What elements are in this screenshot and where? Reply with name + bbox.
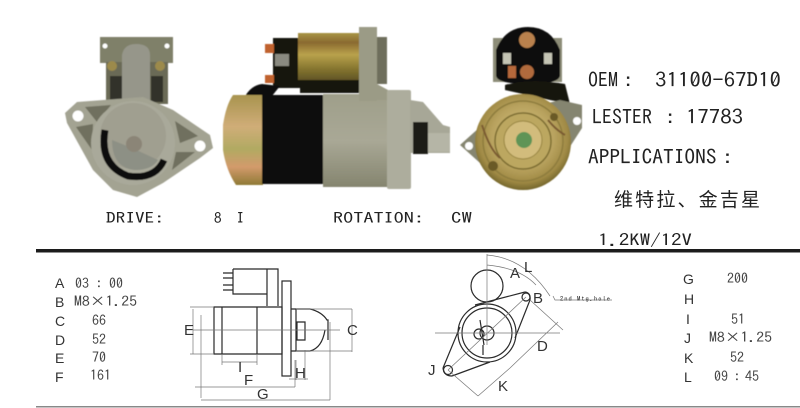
diagram: side dimension drawing: I bbox=[238, 359, 242, 376]
divider: bottom rule bbox=[36, 406, 800, 408]
diagram: side dimension drawing: H bbox=[295, 365, 306, 382]
spec: OEM number: OEM bbox=[588, 70, 618, 90]
diagram: side dimension drawing: E bbox=[184, 322, 194, 339]
spec: OEM number: 31100-67D10 bbox=[655, 70, 781, 90]
dimension table: left: 52 bbox=[92, 332, 106, 346]
dimension table: left: C bbox=[55, 313, 65, 329]
dimension table: left: 70 bbox=[92, 350, 106, 364]
dimension table: right: K bbox=[684, 350, 694, 366]
dimension table: right bbox=[683, 271, 772, 385]
spec: applications heading: APPLICATIONS： bbox=[588, 147, 738, 167]
dimension table: left: E bbox=[55, 350, 64, 366]
dimension table: left: 00 bbox=[109, 276, 123, 290]
dimension table: right: I bbox=[686, 311, 690, 327]
dimension table: right: J bbox=[684, 330, 691, 346]
dimension table: left: 161 bbox=[90, 368, 111, 382]
dimension table: left: F bbox=[55, 369, 64, 385]
dimension table: left: 03 bbox=[75, 276, 89, 290]
diagram: front dimension drawing: L bbox=[524, 259, 532, 276]
diagram: front dimension drawing: A bbox=[510, 265, 520, 282]
dimension table: right: H bbox=[684, 291, 694, 307]
dimension table: left bbox=[55, 275, 137, 385]
photo: starter side view bbox=[223, 27, 450, 189]
dimension table: left: ： bbox=[92, 276, 106, 290]
diagram: side dimension drawing: C bbox=[347, 322, 358, 339]
dimension table: right: 09 bbox=[714, 369, 728, 383]
dimension table: right: 52 bbox=[730, 350, 744, 364]
diagram: front dimension drawing: K bbox=[498, 378, 508, 395]
dimension table: right: 51 bbox=[731, 312, 745, 326]
caption: drive value: 8 I bbox=[214, 210, 244, 225]
dimension table: right: 45 bbox=[745, 369, 759, 383]
diagram: front dimension drawing: 2nd Mtg.hole bbox=[560, 295, 610, 302]
diagram: side dimension drawing: G bbox=[257, 386, 269, 403]
spec: power rating: 1.2KW/12V bbox=[598, 232, 692, 248]
spec: Lester number: LESTER bbox=[592, 107, 652, 127]
dimension table: left: D bbox=[55, 332, 65, 348]
divider: section rule bbox=[36, 249, 800, 252]
spec: Lester number: ： bbox=[660, 107, 680, 127]
dimension table: right: 200 bbox=[727, 271, 748, 285]
spec: applications vehicles: 维特拉、金吉星 bbox=[614, 189, 760, 211]
dimension table: left: M8×1.25 bbox=[74, 294, 137, 308]
dimension table: right: ： bbox=[730, 369, 744, 383]
dimension table: right: G bbox=[683, 271, 694, 287]
caption: rotation: ROTATION: bbox=[333, 210, 424, 225]
photo: starter front view bbox=[65, 37, 213, 197]
caption: drive: DRIVE: bbox=[106, 210, 164, 225]
diagram: front dimension drawing: J bbox=[428, 362, 436, 379]
caption: rotation value: CW bbox=[451, 210, 473, 225]
dimension table: left: A bbox=[55, 275, 65, 291]
spec: Lester number: 17783 bbox=[686, 107, 743, 127]
dimension table: right: M8×1.25 bbox=[709, 330, 772, 344]
diagram: front dimension drawing bbox=[428, 254, 612, 396]
spec: OEM number: ： bbox=[618, 70, 638, 90]
diagram: front dimension drawing: D bbox=[537, 338, 548, 355]
dimension table: right: L bbox=[684, 369, 692, 385]
diagram: front dimension drawing: B bbox=[533, 290, 543, 307]
dimension table: left: 66 bbox=[92, 313, 106, 327]
diagram: side dimension drawing bbox=[184, 269, 358, 403]
dimension table: left: B bbox=[55, 294, 64, 310]
diagram: side dimension drawing: F bbox=[244, 372, 253, 389]
photo: starter rear view bbox=[460, 27, 582, 190]
